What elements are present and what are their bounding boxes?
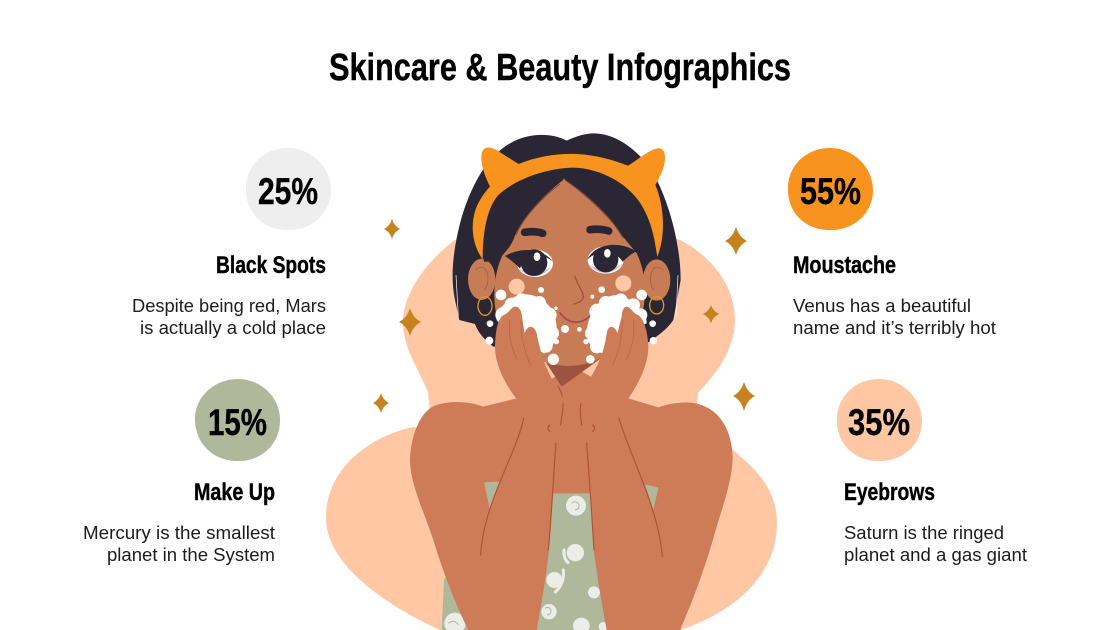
stat: 15% Make Up	[83, 379, 280, 565]
description: Saturn is the ringed	[844, 523, 1004, 543]
eyes	[505, 245, 637, 277]
badge: 25%	[246, 148, 331, 230]
stat: 55% Moustache	[788, 148, 996, 338]
illustration: woman head	[453, 133, 681, 403]
description: planet and a gas giant	[844, 545, 1027, 565]
badge: 55%: 55%	[800, 171, 861, 212]
badge: 35%	[837, 379, 922, 461]
headband with cat ears	[473, 148, 665, 259]
front hair	[483, 177, 657, 262]
title: Skincare & Beauty Infographics	[329, 47, 791, 89]
badge: 55%	[788, 148, 873, 230]
description: name and it’s terribly hot	[793, 318, 996, 338]
hands	[495, 307, 648, 403]
face	[494, 178, 645, 366]
badge: 15%: 15%	[208, 402, 267, 443]
description: Venus has a beautiful	[793, 296, 971, 316]
ears	[468, 259, 670, 301]
badge: 35%: 35%	[848, 402, 910, 443]
nose and mouth	[560, 277, 589, 322]
description: is actually a cold place	[140, 318, 326, 338]
hairline strands	[516, 181, 623, 238]
description	[132, 296, 326, 338]
arms and chest	[410, 367, 733, 630]
badge: 15%	[195, 379, 280, 461]
description	[844, 523, 1027, 565]
badge: 25%: 25%	[258, 171, 318, 212]
hair strands	[456, 275, 678, 317]
heading: Moustache	[793, 252, 896, 279]
dress showing between arms	[484, 482, 658, 510]
illustration: woman body	[410, 353, 733, 630]
foam	[485, 286, 657, 365]
cheek blush	[509, 275, 631, 295]
stat: 35% Eyebrows	[837, 379, 1027, 565]
dress	[442, 482, 682, 630]
heading: Black Spots	[216, 252, 326, 279]
heading: Eyebrows	[844, 479, 935, 506]
sparkles	[373, 219, 755, 413]
description	[793, 296, 996, 338]
stat: 25% Black Spots	[132, 148, 331, 338]
description: Despite being red, Mars	[132, 296, 326, 316]
description	[83, 523, 275, 565]
background peach blob	[326, 200, 777, 630]
eyebrows	[525, 229, 609, 233]
earrings	[478, 297, 664, 315]
back hair	[453, 133, 681, 347]
neck shadow	[540, 353, 603, 387]
description: Mercury is the smallest	[83, 523, 275, 543]
description: planet in the System	[107, 545, 275, 565]
heading: Make Up	[194, 479, 275, 506]
